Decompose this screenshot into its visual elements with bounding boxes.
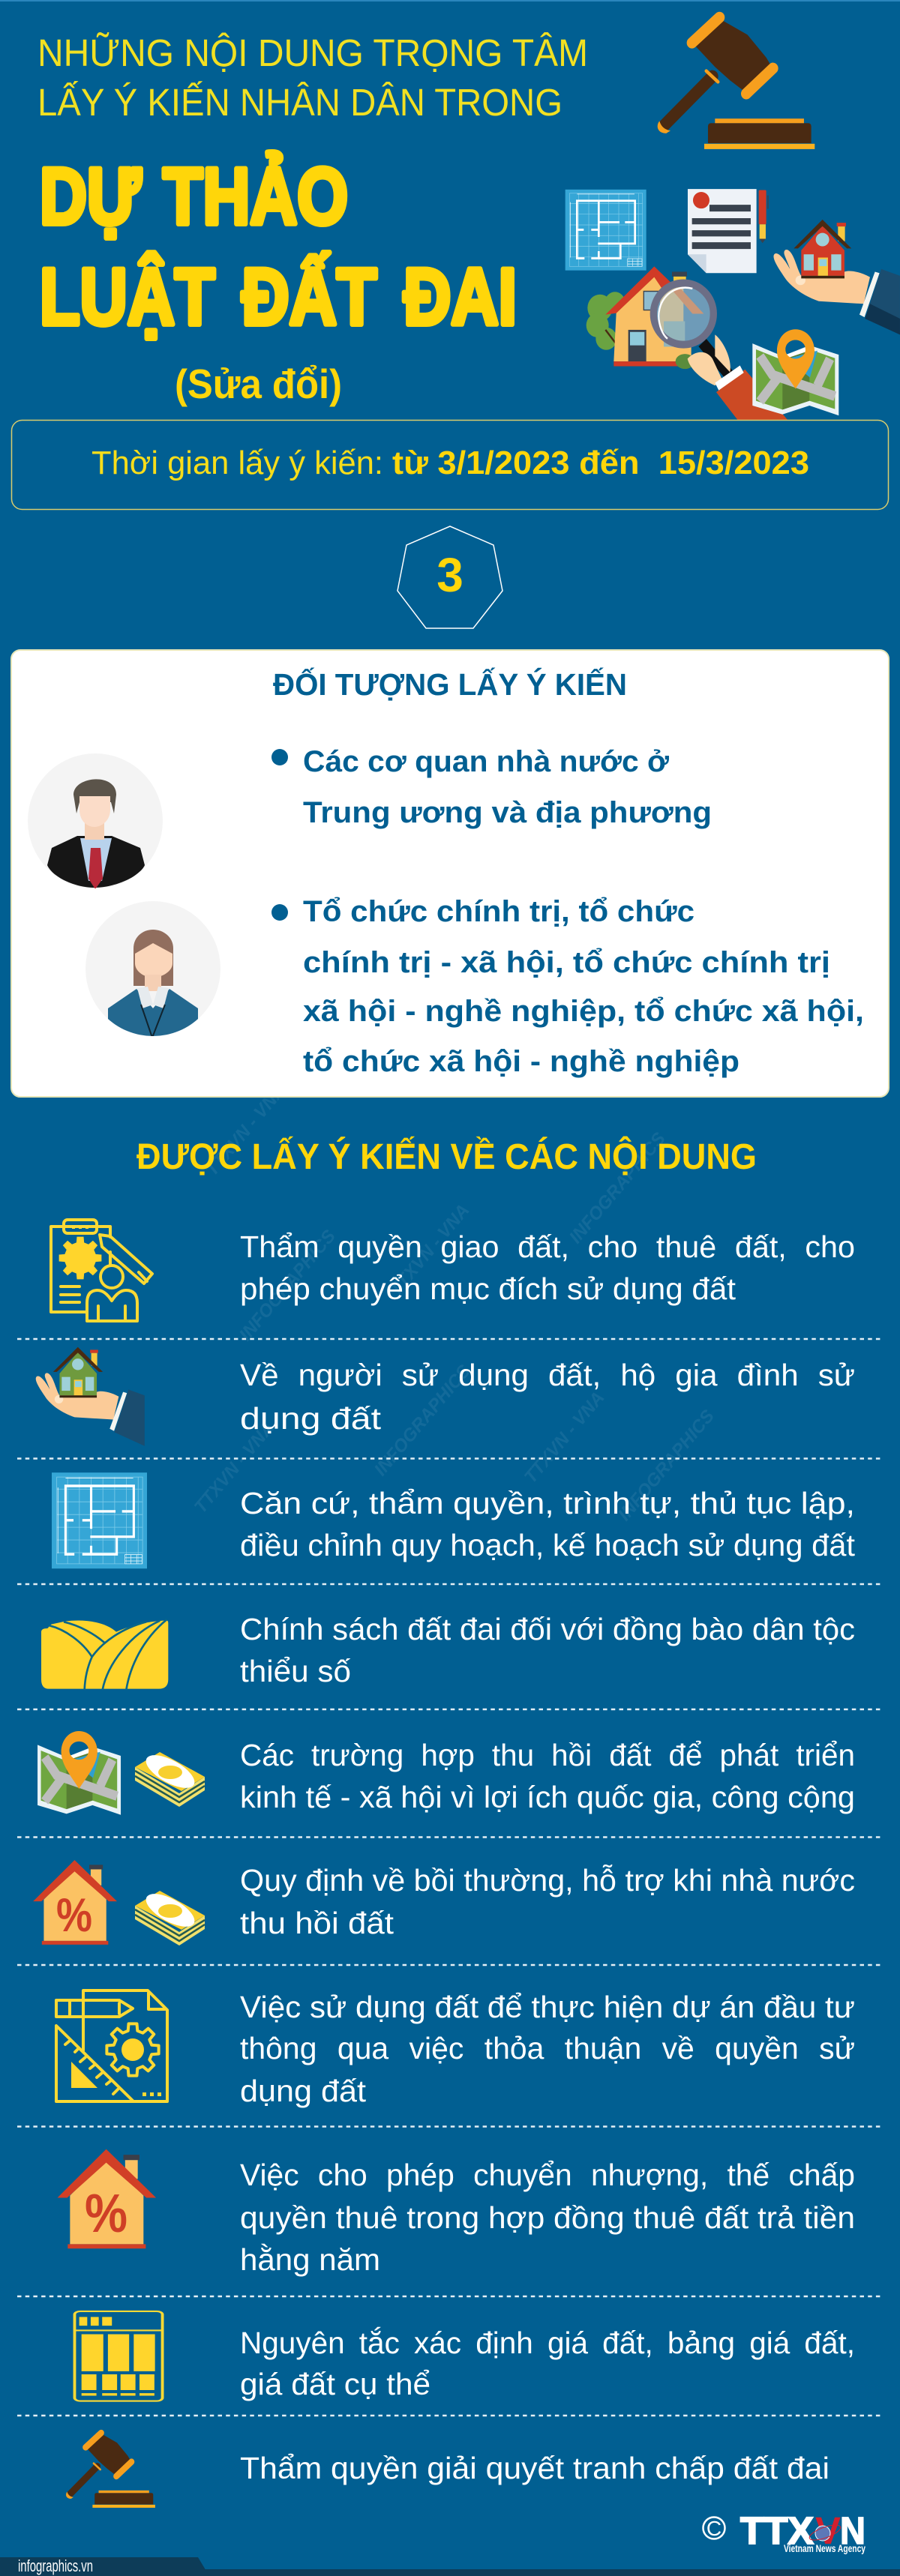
text: TTXVN - VNA <box>520 1388 608 1487</box>
row 2 <box>36 1347 855 1446</box>
text <box>240 1612 855 1688</box>
text: INFOGRAPHICS <box>566 1129 670 1248</box>
text: INFOGRAPHICS <box>614 1406 718 1525</box>
row 9 <box>74 2311 855 2401</box>
title: subtitle: NHỮNG NỘI DUNG TRỌNG TÂM <box>38 31 588 74</box>
text: giá đất cụ thể <box>240 2367 430 2401</box>
text: thu hồi đất <box>240 1906 394 1940</box>
text: INFOGRAPHICS <box>370 1361 475 1480</box>
icon: woman avatar <box>86 901 220 1046</box>
text <box>240 1486 856 1562</box>
bullet list: group 1: Trung ương và địa phương <box>303 796 712 829</box>
icon: house percent <box>58 2149 156 2248</box>
icon: money <box>135 1887 205 1945</box>
bullet list: group 2: tổ chức xã hội - nghề nghiệp <box>303 1045 740 1078</box>
text <box>240 2326 855 2401</box>
text: INFOGRAPHICS <box>236 1227 340 1345</box>
text: Quy định về bồi thường, hỗ trợ khi nhà nước <box>240 1863 855 1898</box>
heading: content list: ĐƯỢC LẤY Ý KIẾN VỀ CÁC NỘI DUNG <box>136 1136 757 1177</box>
text: Chính sách đất đai đối với đồng bào dân tộc <box>240 1612 855 1646</box>
row 5 <box>38 1731 855 1815</box>
icon: map <box>38 1731 121 1815</box>
logo: TTXVN: Vietnam News Agency <box>784 2543 866 2554</box>
logo: TTXVN: N <box>840 2509 866 2552</box>
bullet list: group 2: Tổ chức chính trị, tổ chức <box>303 895 694 928</box>
icon: man avatar <box>28 753 163 889</box>
text: phép chuyển mục đích sử dụng đất <box>240 1272 736 1306</box>
text: điều chỉnh quy hoạch, kế hoạch sử dụng đất <box>240 1528 856 1562</box>
icon: drafting plan <box>56 1990 167 2101</box>
text: thiểu số <box>240 1654 351 1688</box>
title: main heading <box>40 151 517 342</box>
row 1 <box>51 1220 855 1321</box>
panel: consultation subjects <box>11 650 889 1097</box>
text: hằng năm <box>240 2242 380 2277</box>
row 6 <box>33 1860 855 1945</box>
footer bar <box>0 2557 900 2576</box>
icon: money <box>135 1748 205 1807</box>
text: Căn cứ, thẩm quyền, trình tự, thủ tục lập, <box>240 1486 855 1520</box>
bullet list: group 1 <box>272 745 712 829</box>
bullet list: group 1: Các cơ quan nhà nước ở <box>303 745 670 778</box>
text <box>240 1358 855 1436</box>
time panel <box>12 420 888 510</box>
bullet list: group 2: chính trị - xã hội, tổ chức chính trị <box>303 946 830 979</box>
title: subtitle: LẤY Ý KIẾN NHÂN DÂN TRONG <box>38 80 562 124</box>
row 10 <box>66 2433 830 2508</box>
icon: house percent: % <box>85 2184 128 2244</box>
logo: TTXVN: C <box>706 2517 722 2540</box>
icon: gavel small <box>66 2433 155 2508</box>
time panel: từ 3/1/2023 đến 15/3/2023 <box>392 445 809 481</box>
text: thông qua việc thỏa thuận về quyền sử <box>240 2031 855 2065</box>
icon: house percent: % <box>56 1889 92 1942</box>
title: main heading: LUẬT ĐẤT ĐAI <box>40 252 517 342</box>
logo: TTXVN <box>704 2509 866 2554</box>
text: dụng đất <box>240 2074 367 2108</box>
text: quyền thuê trong hợp đồng thuê đất trả tiền <box>240 2200 855 2235</box>
text: TTXVN - VNA <box>202 1080 290 1180</box>
icon: document and pen <box>688 189 768 273</box>
icon: clipboard gear person <box>51 1220 152 1321</box>
text: TTXVN - VNA <box>386 1200 473 1300</box>
icon: house under magnifier <box>586 266 788 420</box>
text: Về người sử dụng đất, hộ gia đình sử <box>240 1358 855 1392</box>
badge: number 3: 3 <box>436 548 464 602</box>
icon: price table <box>74 2311 163 2401</box>
title: main heading: DỰ THẢO <box>40 151 348 241</box>
text <box>240 1990 855 2108</box>
bullet list: group 2 <box>272 895 864 1078</box>
logo: TTXVN: TTX <box>740 2509 814 2552</box>
row 4 <box>41 1612 855 1690</box>
text <box>240 1863 855 1940</box>
text: dụng đất <box>240 1401 382 1436</box>
icon: fields <box>41 1619 168 1690</box>
text: Các trường hợp thu hồi đất để phát triển <box>240 1738 855 1772</box>
icon: house percent <box>33 1860 117 1945</box>
text: kinh tế - xã hội vì lợi ích quốc gia, công cộng <box>240 1780 855 1814</box>
icon: hand holding house <box>773 220 900 334</box>
text: Việc cho phép chuyển nhượng, thế chấp <box>240 2158 855 2192</box>
icon: gavel <box>658 17 814 149</box>
text: Việc sử dụng đất để thực hiện dự án đầu tư <box>240 1990 855 2024</box>
text: Thẩm quyền giao đất, cho thuê đất, cho <box>240 1230 855 1264</box>
icon: hand holding green house <box>36 1347 145 1446</box>
icon: blueprint small <box>52 1472 147 1568</box>
text <box>240 1230 855 1306</box>
row 7 <box>56 1990 855 2108</box>
time panel: Thời gian lấy ý kiến: <box>92 445 383 481</box>
text <box>240 1738 855 1814</box>
icon: map with pin <box>752 329 838 415</box>
row 8 <box>58 2149 855 2277</box>
title: subtitle <box>38 31 588 124</box>
footer bar: infographics.vn <box>18 2557 93 2575</box>
text <box>240 2158 855 2277</box>
text: Thẩm quyền giải quyết tranh chấp đất đai <box>240 2451 830 2485</box>
panel heading: ĐỐI TƯỢNG LẤY Ý KIẾN <box>273 667 627 702</box>
row 3 <box>52 1472 856 1568</box>
logo: TTXVN: V <box>815 2509 841 2552</box>
title: amended note: (Sửa đổi) <box>175 361 342 407</box>
text: TTXVN - VNA <box>190 1418 278 1517</box>
badge: number 3 <box>398 526 502 628</box>
text: Nguyên tắc xác định giá đất, bảng giá đất, <box>240 2326 855 2360</box>
bullet list: group 2: xã hội - nghề nghiệp, tổ chức xã hội, <box>303 995 864 1028</box>
icon: blueprint <box>566 190 646 271</box>
